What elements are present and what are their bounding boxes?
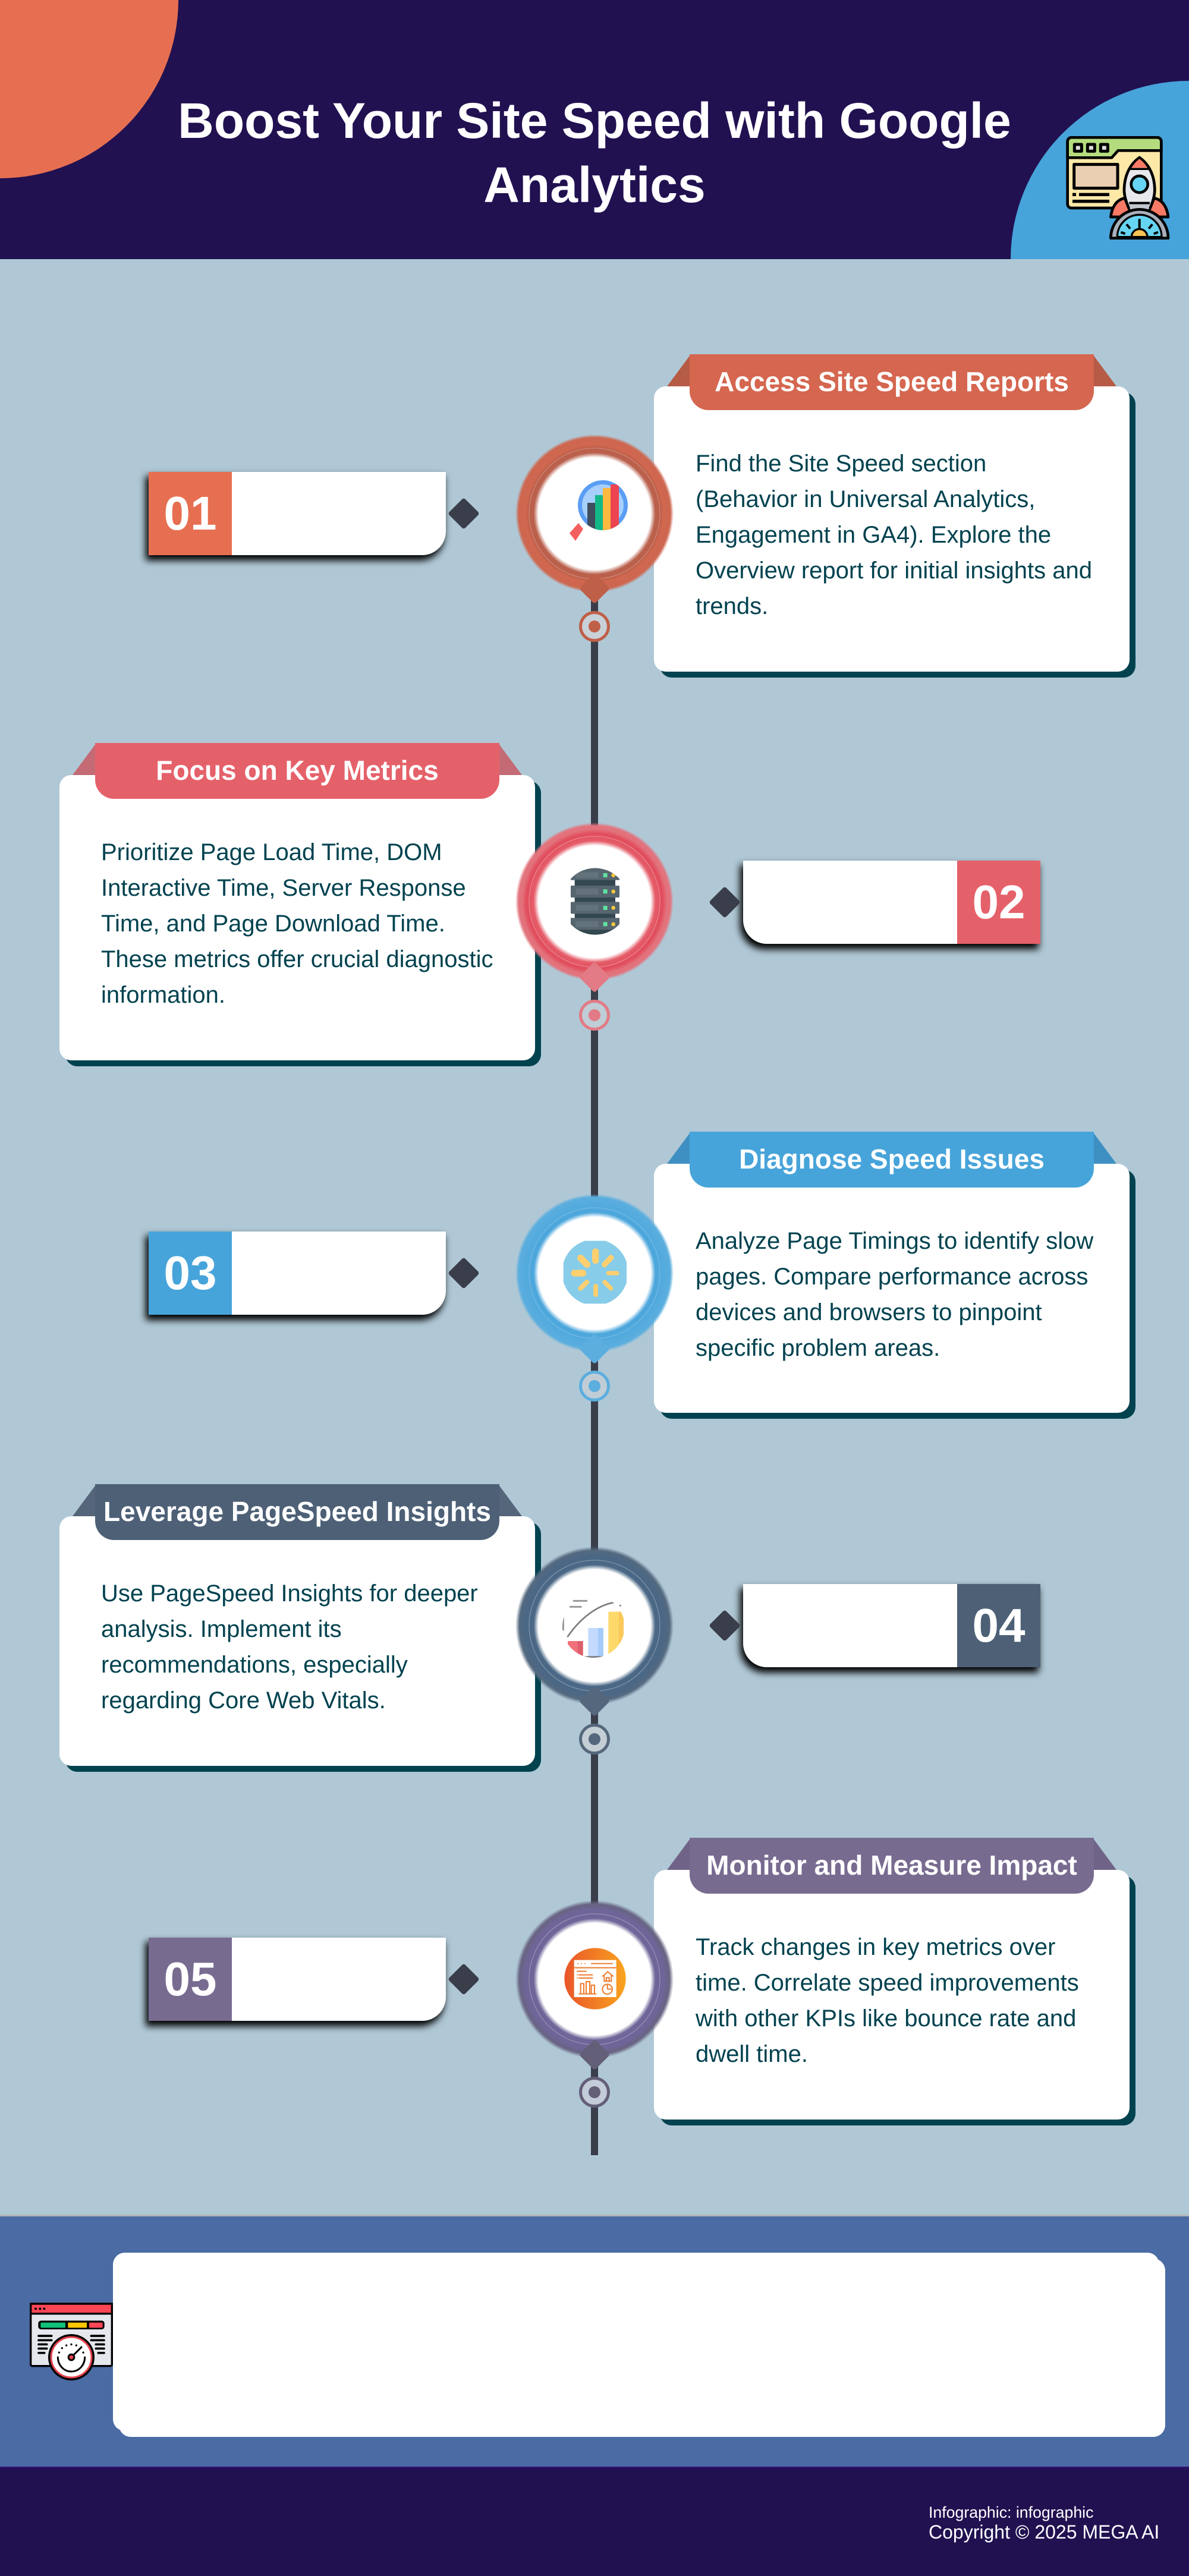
title	[178, 93, 1011, 213]
ring 3	[515, 1194, 674, 1352]
icon: server rack	[571, 868, 619, 935]
number tag 05	[149, 1938, 446, 2021]
number tag 03	[149, 1232, 446, 1315]
step 5 node	[515, 1900, 674, 2106]
panel: step 2 card	[59, 743, 541, 1066]
footer label: Infographic: infographic	[929, 2503, 1093, 2521]
heading: step 2: Focus on Key Metrics	[156, 755, 439, 786]
footer band	[0, 2467, 1189, 2576]
text: step 4: regarding Core Web Vitals.	[101, 1687, 386, 1714]
number tag 02: 02	[973, 876, 1025, 928]
number tag 01	[149, 472, 446, 555]
text: step 5: time. Correlate speed improvements	[696, 1970, 1079, 1996]
text: step 5: with other KPIs like bounce rate and	[696, 2005, 1076, 2032]
number tag 02	[743, 861, 1040, 944]
panel: step 1 card	[654, 354, 1135, 678]
icon: loading spinner	[562, 1239, 628, 1305]
decorative orange circle	[0, 0, 178, 178]
empty white callout panel	[113, 2253, 1159, 2431]
text: step 4	[101, 1580, 478, 1714]
step 4 node	[515, 1547, 674, 1753]
number tag 04: 04	[973, 1599, 1025, 1652]
decorative blue circle	[1011, 81, 1189, 437]
timeline marker 1	[580, 612, 609, 641]
heading: step 2	[95, 743, 499, 799]
ring 2	[515, 823, 674, 981]
panel: step 5 card	[654, 1838, 1135, 2125]
connector diamond 01	[448, 497, 480, 530]
text: step 5: dwell time.	[696, 2041, 808, 2067]
text: step 5: Track changes in key metrics over	[696, 1934, 1055, 1960]
connector diamond 05	[448, 1963, 480, 1995]
text: step 3: pages. Compare performance across	[696, 1264, 1088, 1290]
text: step 1: Overview report for initial insights and	[696, 558, 1092, 584]
pointer diamond 1	[579, 573, 610, 604]
heading: step 4	[95, 1484, 499, 1540]
timeline marker 4	[580, 1725, 609, 1753]
heading: step 1: Access Site Speed Reports	[715, 366, 1069, 397]
icon: bar chart with trend	[563, 1601, 624, 1659]
connector diamond 02	[709, 886, 741, 918]
text: step 2	[101, 839, 493, 1008]
text: step 4: analysis. Implement its	[101, 1616, 342, 1642]
number tag 04	[743, 1584, 1040, 1667]
timeline marker 5	[580, 2078, 609, 2106]
icon: speed test browser window	[31, 2304, 112, 2380]
heading: step 5	[690, 1838, 1094, 1894]
header band	[0, 0, 1189, 259]
text: step 1: Engagement in GA4). Explore the	[696, 522, 1051, 548]
timeline marker 2	[580, 1001, 609, 1029]
icon: analytics dashboard	[564, 1948, 626, 2010]
ring 1	[515, 434, 674, 593]
heading: step 4: Leverage PageSpeed Insights	[103, 1496, 491, 1527]
text: step 1: (Behavior in Universal Analytics,	[696, 486, 1035, 512]
step 3 node	[515, 1194, 674, 1400]
text: step 3	[696, 1228, 1094, 1361]
step 2 node	[515, 823, 674, 1029]
text: step 2: Interactive Time, Server Response	[101, 875, 466, 901]
text: step 3: Analyze Page Timings to identify slow	[696, 1228, 1093, 1254]
text: step 1: trends.	[696, 593, 768, 619]
text: step 2: These metrics offer crucial diagnostic	[101, 946, 493, 972]
ring 4	[515, 1547, 674, 1705]
connector diamond 04	[709, 1610, 741, 1642]
heading: step 5: Monitor and Measure Impact	[706, 1850, 1077, 1881]
text: step 2: Time, and Page Download Time.	[101, 911, 445, 937]
text: step 2: information.	[101, 982, 225, 1008]
pointer diamond 2	[579, 962, 610, 993]
heading: step 3	[690, 1132, 1094, 1188]
heading: step 3: Diagnose Speed Issues	[739, 1144, 1045, 1174]
panel: step 3 card	[654, 1132, 1135, 1419]
title: Analytics	[483, 157, 706, 213]
title: Boost Your Site Speed with Google	[178, 93, 1011, 149]
number tag 05: 05	[164, 1953, 216, 2005]
ring 5	[515, 1900, 674, 2058]
timeline spine	[591, 514, 598, 2155]
heading: step 1	[690, 354, 1094, 410]
text: step 4: Use PageSpeed Insights for deeper	[101, 1580, 478, 1607]
timeline marker 3	[580, 1372, 609, 1400]
number tag 03: 03	[164, 1246, 216, 1299]
bottom blue band	[0, 2215, 1189, 2467]
pointer diamond 4	[579, 1686, 610, 1717]
number tag 01: 01	[164, 487, 216, 540]
text: step 1: Find the Site Speed section	[696, 451, 986, 477]
icon: browser with rocket and gauge	[1068, 137, 1168, 238]
text: step 3: devices and browsers to pinpoint	[696, 1299, 1042, 1325]
text: step 5	[696, 1934, 1079, 2067]
text: step 4: recommendations, especially	[101, 1652, 408, 1678]
text: step 1	[696, 451, 1092, 619]
panel: step 4 card	[59, 1484, 541, 1772]
pointer diamond 5	[579, 2039, 610, 2070]
text: step 3: specific problem areas.	[696, 1335, 940, 1361]
copyright: Copyright © 2025 MEGA AI	[929, 2521, 1159, 2543]
pointer diamond 3	[579, 1333, 610, 1364]
step 1 node	[515, 434, 674, 641]
icon: magnifying glass with bars	[570, 480, 628, 541]
text: step 2: Prioritize Page Load Time, DOM	[101, 839, 442, 865]
connector diamond 03	[448, 1257, 480, 1289]
